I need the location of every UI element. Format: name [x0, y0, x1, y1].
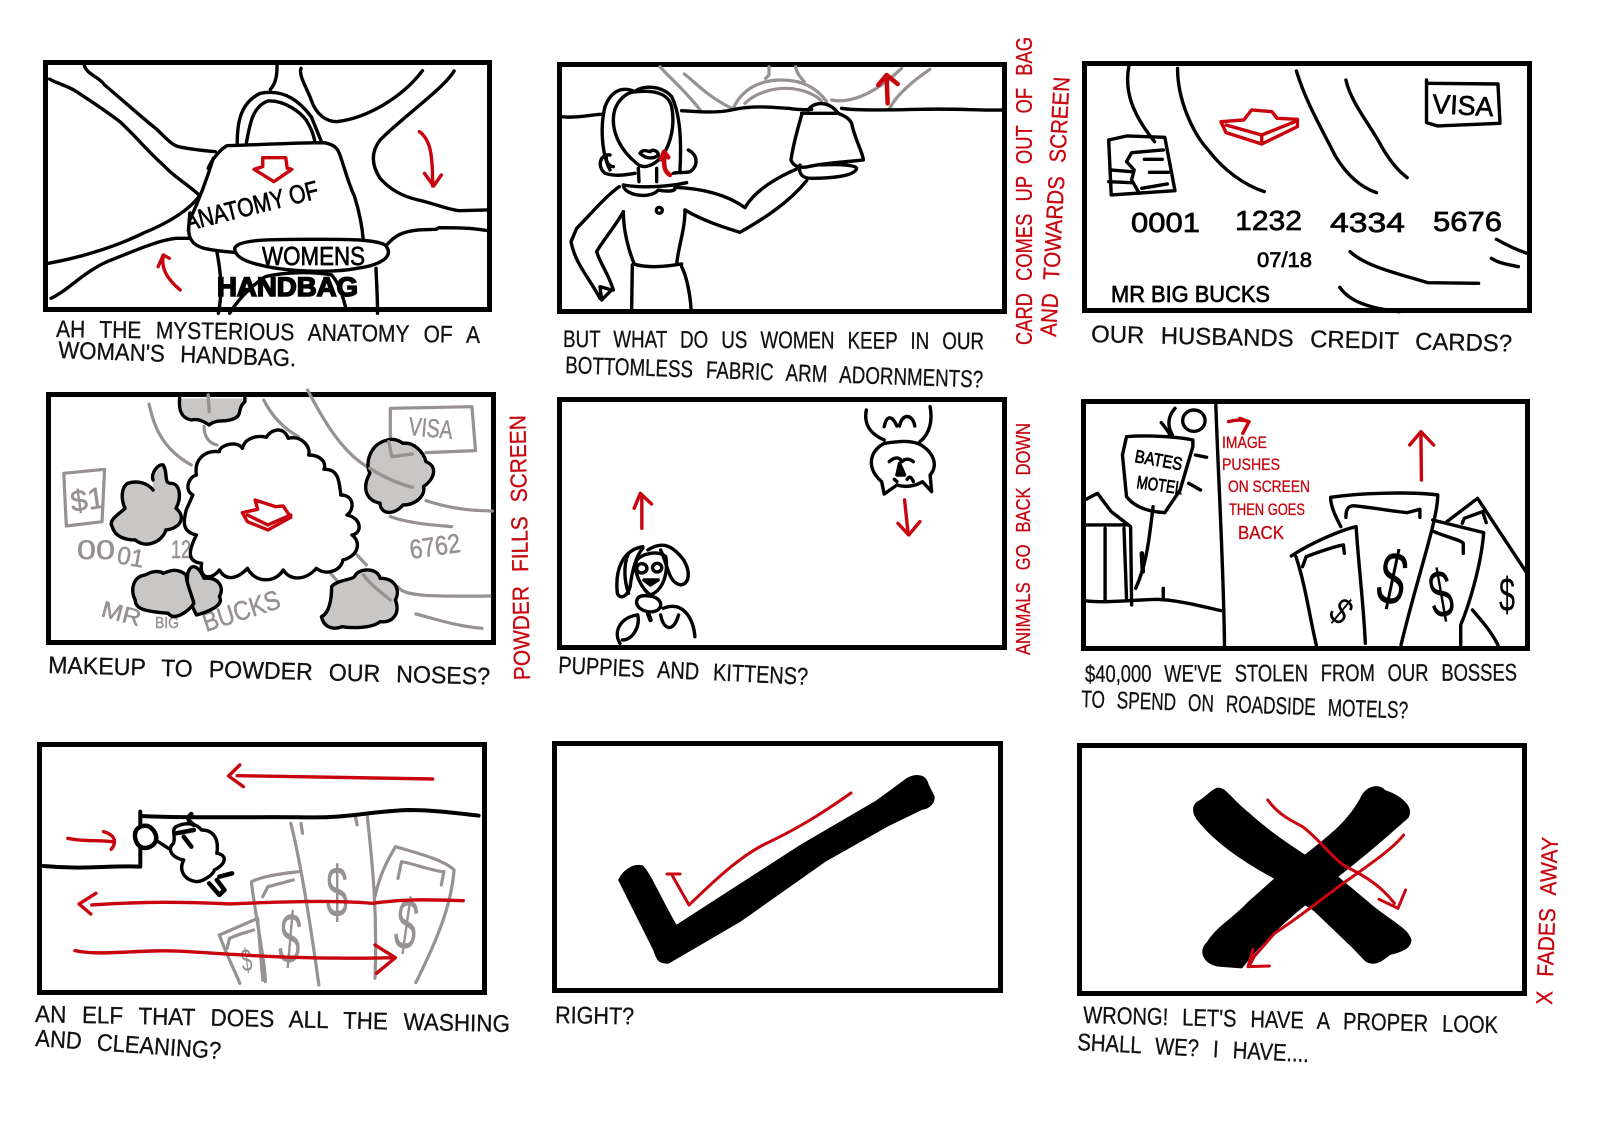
- panel: puppies and kittens: [560, 400, 1004, 648]
- panel: credit card: [1084, 64, 1530, 312]
- panel: stolen money and motel: [1084, 402, 1528, 648]
- faded card text: VISA: [407, 411, 454, 445]
- caption: panel 9: SHALL WE? I HAVE....: [1077, 1029, 1310, 1068]
- card text: [1111, 89, 1502, 307]
- handbag label text: ANATOMY OF: [181, 175, 321, 237]
- red motion arrows: [68, 765, 463, 973]
- caption: panel 2: BUT WHAT DO US WOMEN KEEP IN OUR: [563, 326, 984, 355]
- caption: panel 6: [1081, 659, 1517, 724]
- grey overlap lines and red card icon: [208, 395, 412, 600]
- animation note: card comes up: AND TOWARDS SCREEN: [1035, 76, 1075, 337]
- icon: black check mark: [620, 777, 933, 962]
- faded card text: 12: [171, 536, 191, 564]
- motel sign text and dollar signs: [1133, 446, 1515, 633]
- card text: 5676: [1433, 206, 1502, 237]
- caption: panel 7: [35, 1001, 510, 1065]
- motel sign text and dollar signs: BATES: [1133, 446, 1184, 474]
- handbag label text: [181, 175, 365, 302]
- caption: panel 1: WOMAN'S HANDBAG.: [58, 337, 297, 372]
- animation note: image pushes on screen: [1222, 433, 1310, 543]
- caption: panel 1: [56, 316, 480, 372]
- caption: panel 4: MAKEUP TO POWDER OUR NOSES?: [48, 652, 490, 691]
- panel: makeup powder: [48, 390, 494, 642]
- caption: panel 1: AH THE MYSTERIOUS ANATOMY OF A: [56, 316, 480, 349]
- caption: panel 7: AND CLEANING?: [35, 1025, 222, 1065]
- animation note: image pushes on screen: THEN GOES: [1229, 500, 1305, 519]
- caption: panel 5: PUPPIES AND KITTENS?: [558, 652, 809, 691]
- faded card behind powder: [64, 390, 492, 628]
- motel sign text and dollar signs: $: [1370, 534, 1415, 623]
- faded card text: 01: [115, 541, 146, 574]
- motel sign text and dollar signs: $: [1499, 569, 1515, 622]
- red arrows: [1229, 418, 1434, 480]
- caption: panel 8: RIGHT?: [555, 1002, 634, 1030]
- caption: panel 2: [563, 326, 984, 394]
- grey background road lines: [660, 67, 930, 111]
- card lines, chip and Visa box: [1109, 65, 1527, 312]
- animation note: animals go back down: ANIMALS GO BACK DOWN: [1013, 423, 1035, 655]
- faded bills: [219, 817, 454, 985]
- caption: panel 6: TO SPEND ON ROADSIDE MOTELS?: [1081, 686, 1409, 724]
- faded dollar signs: $: [239, 941, 255, 979]
- card text: 4334: [1330, 207, 1405, 238]
- animation note: image pushes on screen: PUSHES: [1222, 455, 1280, 474]
- caption: panel 7: AN ELF THAT DOES ALL THE WASHING: [35, 1001, 510, 1038]
- card text: MR BIG BUCKS: [1111, 281, 1270, 307]
- animation note: image pushes on screen: ON SCREEN: [1228, 477, 1310, 496]
- panel: elf washing: [40, 744, 484, 992]
- motel scene and bills: [1085, 405, 1527, 645]
- faded dollar signs: [239, 853, 423, 980]
- red tracing arrows: [1248, 800, 1406, 967]
- woman figure and bag: [562, 87, 1002, 308]
- motel sign text and dollar signs: MOTEL: [1135, 472, 1184, 498]
- red card arrows: [661, 75, 898, 175]
- faded card text: MR: [99, 596, 144, 631]
- motel sign text and dollar signs: $: [1423, 554, 1459, 633]
- caption: panel 9: WRONG! LET'S HAVE A PROPER LOOK: [1083, 1002, 1498, 1039]
- faded card text: BUCKS: [199, 584, 284, 638]
- red tracing arrow: [667, 793, 851, 905]
- faded card text: 00: [77, 535, 115, 565]
- panel: anatomy of a woman's handbag: [46, 62, 490, 313]
- card text: 0001: [1131, 207, 1200, 238]
- faded dollar signs: $: [326, 853, 348, 933]
- handbag label text: WOMENS: [262, 241, 365, 271]
- kitten upside down: [866, 407, 934, 494]
- card text: 1232: [1235, 205, 1302, 236]
- panel: woman holding handbag: [560, 64, 1004, 312]
- kitten arrow: [898, 500, 920, 535]
- faded card text: BIG: [155, 615, 179, 632]
- animation note: image pushes on screen: IMAGE: [1222, 433, 1267, 452]
- card text: 07/18: [1257, 249, 1312, 272]
- powder clouds: [111, 398, 434, 628]
- caption: panel 9: [1077, 1002, 1498, 1068]
- panel: check mark: [554, 744, 1000, 990]
- faded dollar signs: $: [276, 898, 305, 980]
- ground line and elf: [43, 810, 479, 895]
- puppy: [617, 545, 695, 643]
- animation note: X fades away: X FADES AWAY: [1531, 836, 1563, 1005]
- faded card text: 6762: [408, 528, 462, 565]
- faded dollar signs: $: [390, 884, 423, 966]
- puppy arrow: [634, 493, 652, 528]
- motel sign text and dollar signs: $: [1321, 590, 1361, 633]
- faded card text: [68, 411, 462, 638]
- icon: black X: [1195, 788, 1410, 967]
- red motion arrows: [158, 132, 441, 290]
- red card icon: [1221, 110, 1297, 144]
- background road lines and handbag sketch: [48, 65, 487, 313]
- faded card text: $1: [68, 482, 107, 519]
- animation note: image pushes on screen: BACK: [1238, 523, 1284, 543]
- card text: VISA: [1432, 89, 1494, 122]
- caption: panel 2: BOTTOMLESS FABRIC ARM ADORNMENTS?: [565, 352, 983, 394]
- handbag label text: HANDBAG: [217, 272, 358, 302]
- panel: cross mark: [1080, 746, 1524, 994]
- caption: panel 3: OUR HUSBANDS CREDIT CARDS?: [1091, 321, 1512, 358]
- animation note: card comes up: [1011, 37, 1075, 345]
- animation note: powder fills screen: POWDER FILLS SCREEN: [504, 415, 535, 680]
